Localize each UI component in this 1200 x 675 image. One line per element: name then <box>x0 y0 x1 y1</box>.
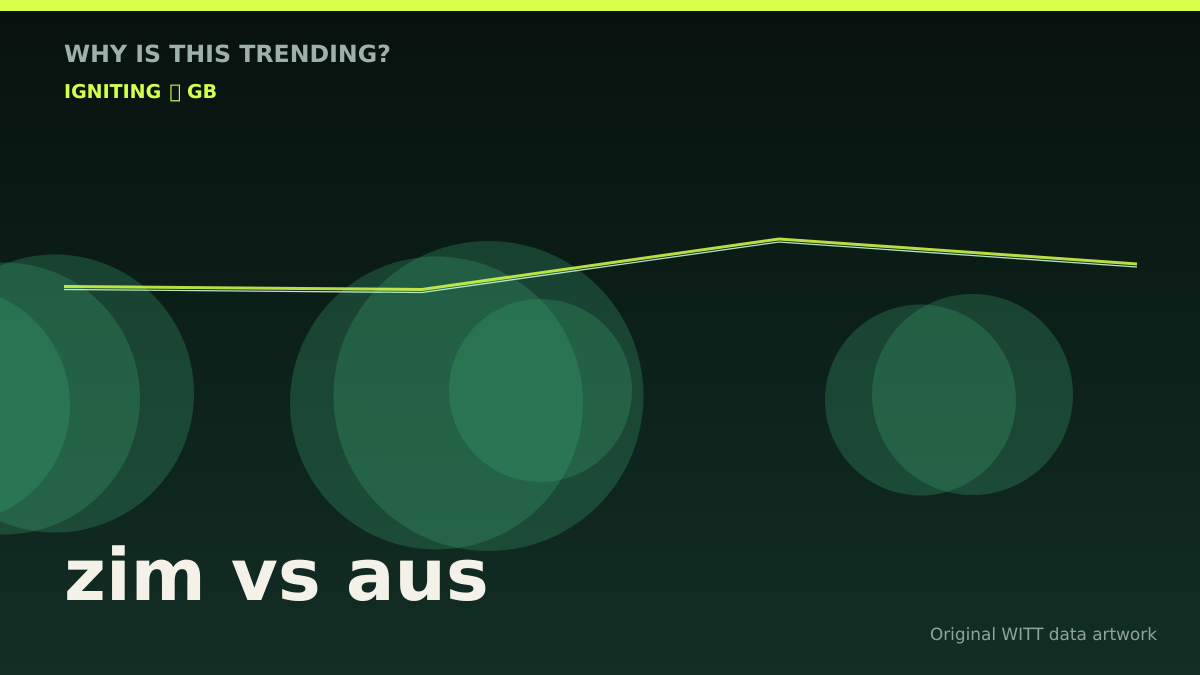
trend line <box>64 239 1137 292</box>
bubble cluster: right <box>825 294 1073 496</box>
eyebrow heading: WHY IS THIS TRENDING? <box>64 40 391 68</box>
footer credit: Original WITT data artwork <box>930 624 1157 644</box>
status label:  <box>170 81 181 103</box>
bubble cluster: centre <box>290 241 644 551</box>
top accent bar <box>0 0 1200 11</box>
status label: IGNITING <box>64 81 161 103</box>
status label: GB <box>187 81 217 103</box>
main title: zim vs aus <box>64 534 489 618</box>
bubble cluster: left <box>0 254 194 534</box>
